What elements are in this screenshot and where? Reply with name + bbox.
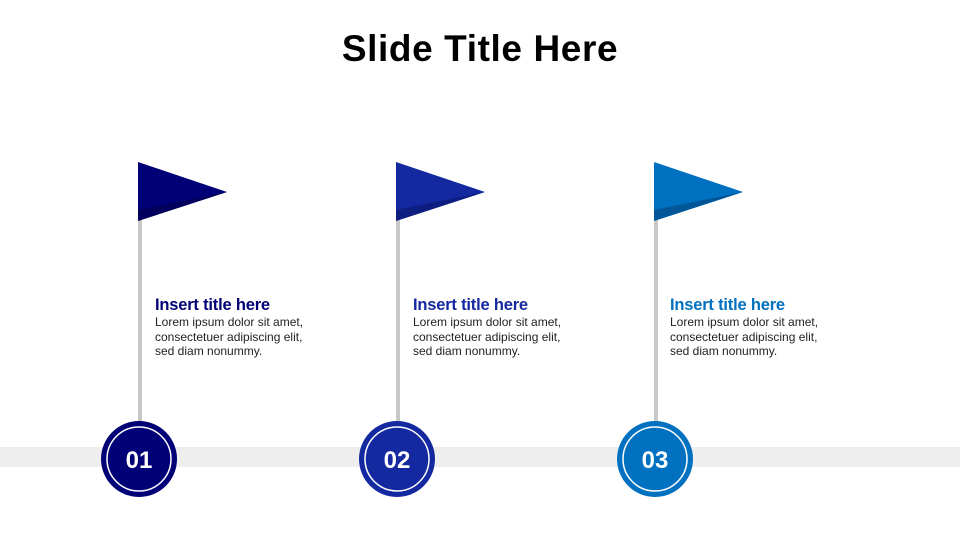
text 1: Lorem ipsum dolor sit amet,: [155, 315, 303, 329]
text 1: consectetuer adipiscing elit,: [155, 330, 302, 344]
text 1: [155, 296, 303, 358]
text 2: [413, 296, 561, 358]
marker 3: 03: [642, 447, 668, 474]
marker 1: [101, 162, 227, 497]
text 1: sed diam nonummy.: [155, 344, 262, 358]
text 1: Insert title here: [155, 296, 270, 314]
text 3: [670, 296, 818, 358]
marker 3: [617, 162, 743, 497]
marker 1: 01: [126, 447, 152, 474]
marker 2: 02: [384, 447, 410, 474]
text 3: Lorem ipsum dolor sit amet,: [670, 315, 818, 329]
marker 2: [359, 162, 485, 497]
text 2: sed diam nonummy.: [413, 344, 520, 358]
text 3: consectetuer adipiscing elit,: [670, 330, 817, 344]
text 2: Lorem ipsum dolor sit amet,: [413, 315, 561, 329]
band: [0, 447, 960, 467]
text 3: Insert title here: [670, 296, 785, 314]
text 3: sed diam nonummy.: [670, 344, 777, 358]
text 2: consectetuer adipiscing elit,: [413, 330, 560, 344]
text 2: Insert title here: [413, 296, 528, 314]
title: Slide Title Here: [342, 28, 618, 69]
